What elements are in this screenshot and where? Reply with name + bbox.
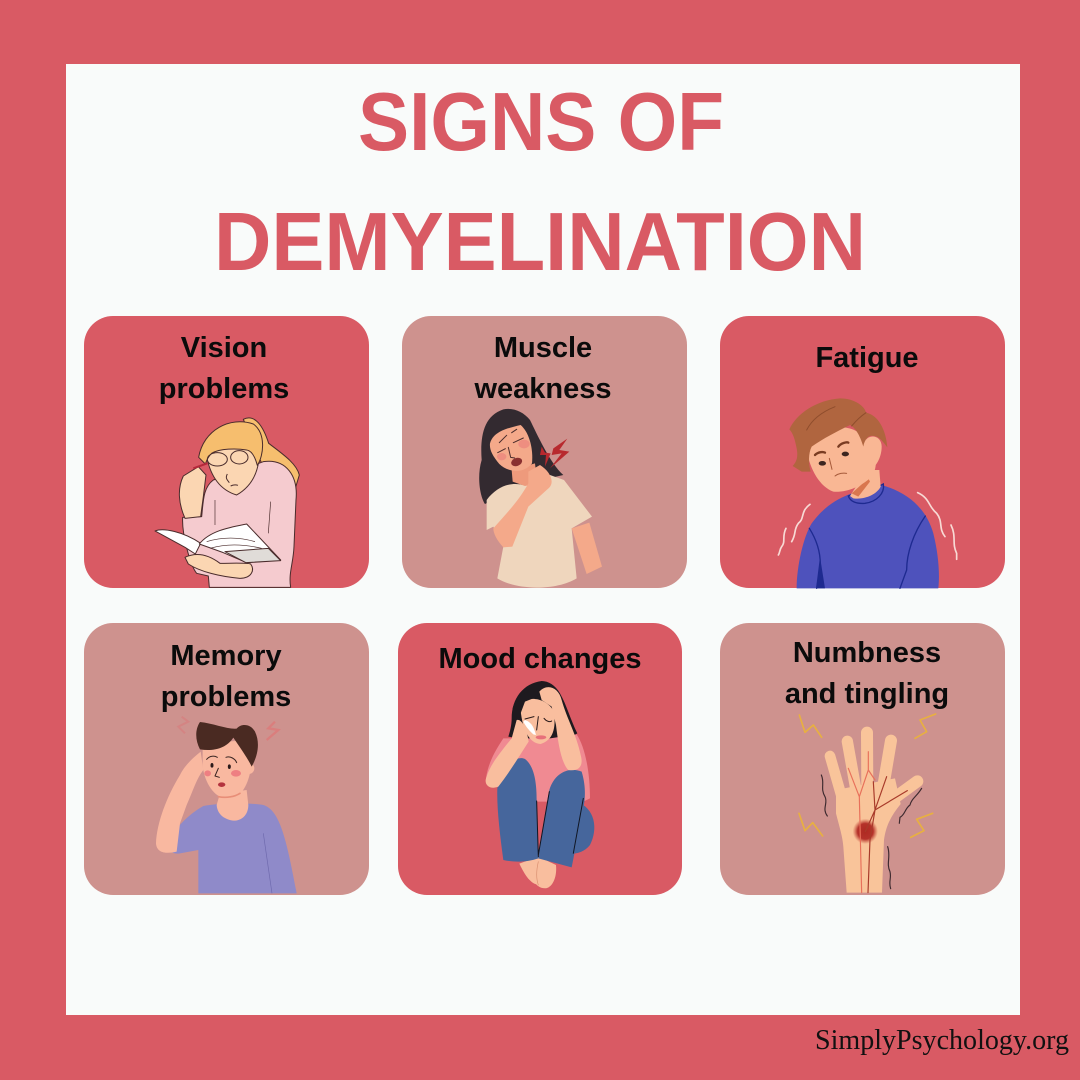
- heading: mood changes: Mood changes: [438, 643, 642, 675]
- heading: vision problems: Vision: [181, 332, 267, 364]
- heading: vision problems: problems: [159, 373, 289, 405]
- panel: vision problems: [84, 316, 369, 588]
- heading: memory problems: Memory: [170, 640, 282, 672]
- heading: numbness and tingling: Numbness: [793, 637, 941, 669]
- icon: tired boy in blue sweater: [778, 398, 957, 588]
- icon: confused man touching temple: [156, 717, 297, 893]
- panel: memory problems: [84, 623, 369, 895]
- icon: woman reading with glasses: [155, 418, 299, 587]
- icon: woman holding neck: [479, 409, 602, 588]
- heading: memory problems: problems: [161, 681, 291, 713]
- heading: fatigue: Fatigue: [815, 342, 919, 374]
- heading: muscle weakness: Muscle: [494, 332, 592, 364]
- heading: numbness and tingling: and tingling: [785, 678, 949, 710]
- title: SIGNS OF: [358, 75, 724, 168]
- panel: muscle weakness: [402, 316, 687, 588]
- heading: muscle weakness: weakness: [473, 373, 612, 405]
- title: [214, 75, 866, 288]
- panel: numbness and tingling: [720, 623, 1005, 895]
- white content panel: [66, 64, 1020, 1015]
- footer credit: SimplyPsychology.org: [815, 1025, 1069, 1056]
- icon: crying woman hugging knees: [486, 681, 594, 888]
- title: DEMYELINATION: [214, 195, 866, 288]
- panel: fatigue: [720, 316, 1005, 588]
- icon: hand and wrist with nerve pain: [799, 714, 936, 893]
- panel: mood changes: [398, 623, 682, 895]
